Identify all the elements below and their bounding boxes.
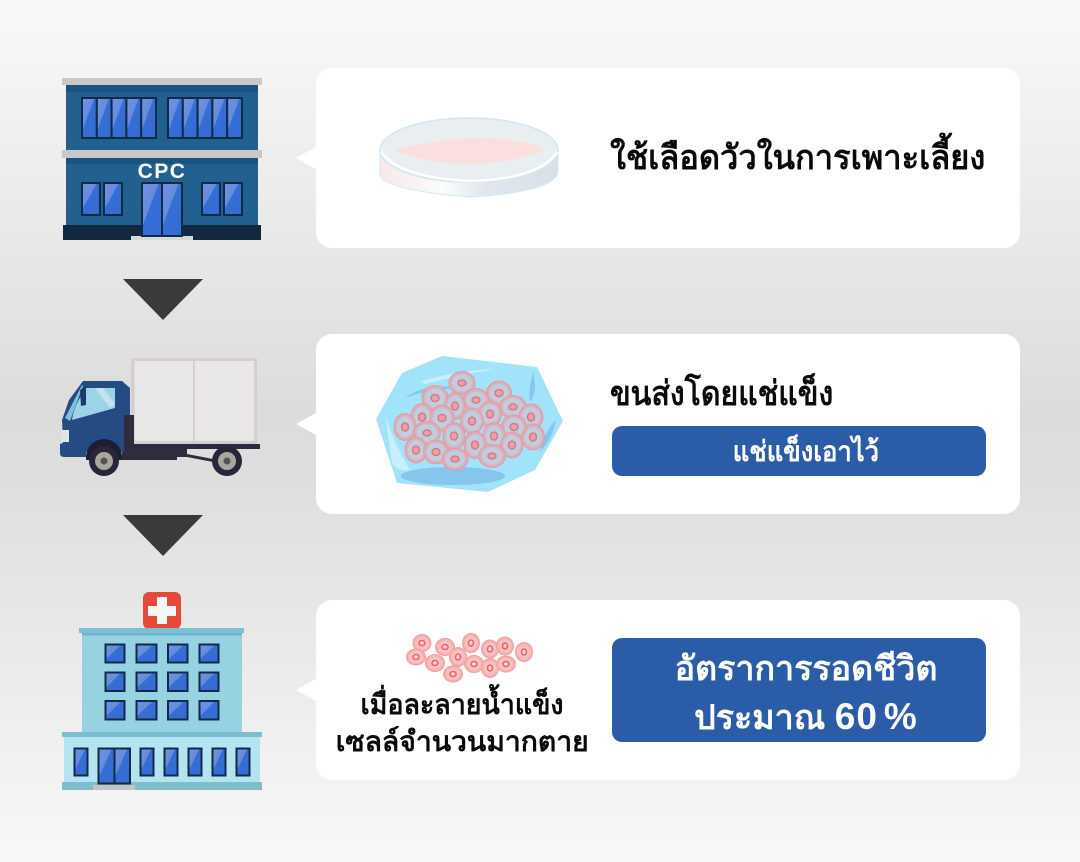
sign: CPC: CPC [138, 160, 186, 183]
arrow: down 2 [123, 515, 203, 556]
panel: transport step [316, 334, 1020, 514]
windows upper left [82, 98, 156, 138]
result bar: survival rate: ประมาณ 60% [694, 696, 918, 737]
label bar: frozen: แช่แข็งเอาไว้ [733, 436, 879, 467]
door [142, 183, 182, 236]
windows lower [82, 183, 242, 215]
icon: truck [60, 358, 260, 476]
label bar: frozen [612, 426, 986, 476]
illustration: petri dish [380, 118, 558, 197]
icon: CPC building [62, 78, 262, 240]
result bar: survival rate [612, 638, 986, 742]
caption: thaw result: เมื่อละลายน้ำแข็ง [361, 689, 563, 720]
icon: hospital [62, 592, 262, 790]
heading: culture: ใช้เลือดวัวในการเพาะเลี้ยง [610, 139, 985, 177]
speech tail: transport [296, 413, 316, 435]
hospital windows [74, 644, 250, 784]
caption: thaw result [336, 684, 588, 757]
windows upper right [168, 98, 242, 138]
arrow: down 1 [123, 279, 203, 320]
illustration: thawed cells [406, 633, 533, 682]
speech tail: hospital [296, 679, 316, 701]
illustration: frozen cells [376, 356, 563, 492]
speech tail: culture [296, 147, 316, 169]
panel: hospital step [316, 600, 1020, 780]
result bar: survival rate: อัตราการรอดชีวิต [675, 650, 937, 688]
caption: thaw result: เซลล์จำนวนมากตาย [336, 726, 588, 757]
heading: transport: ขนส่งโดยแช่แข็ง [610, 375, 833, 413]
panel: culture step [316, 68, 1020, 248]
